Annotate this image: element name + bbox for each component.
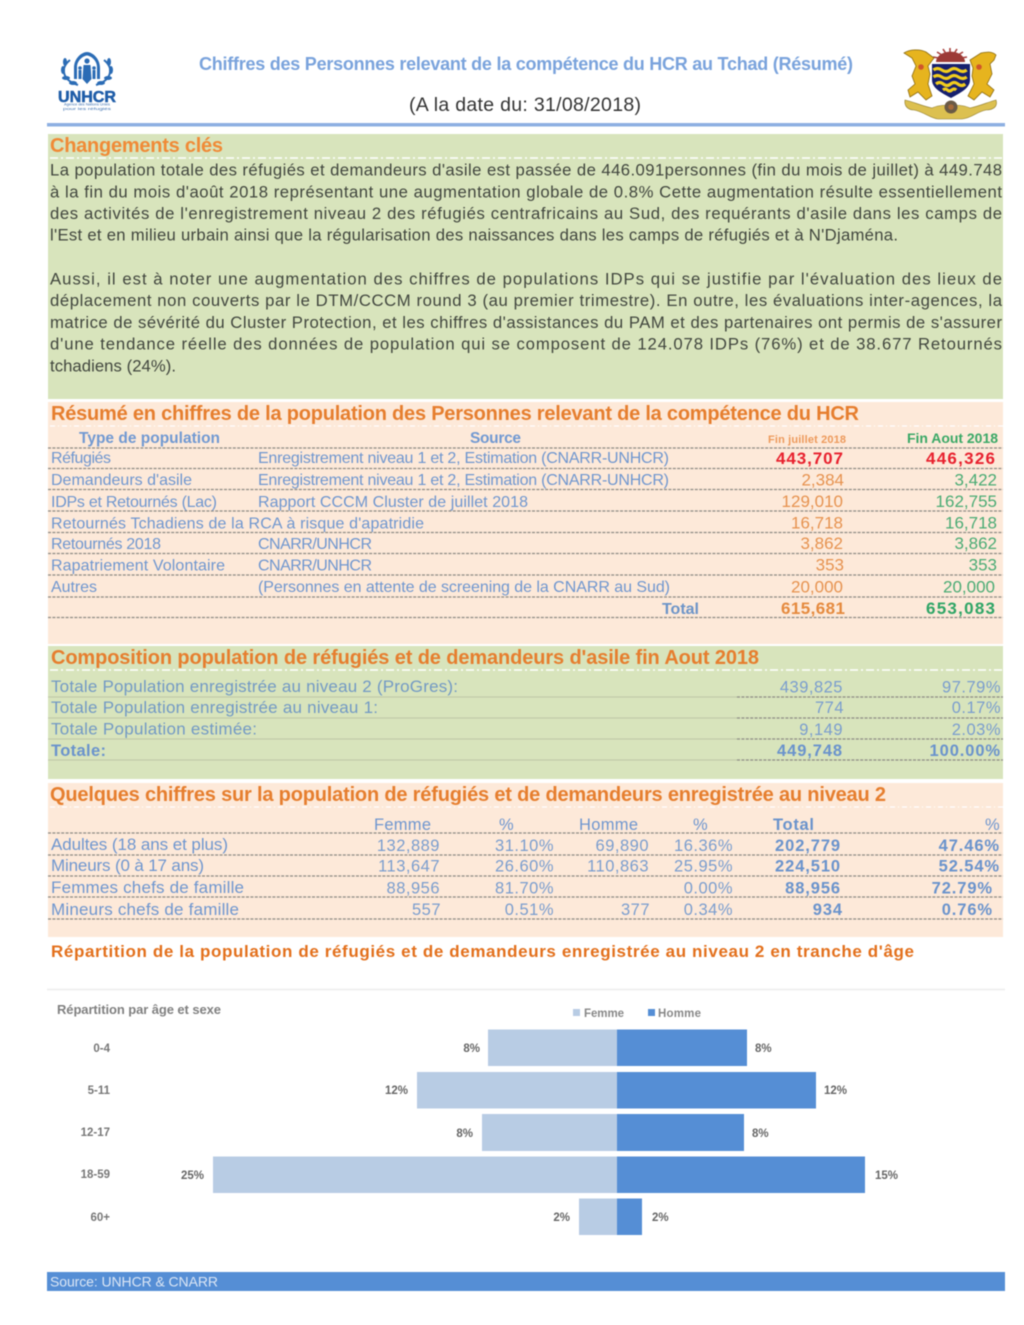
table header: Homme	[579, 816, 638, 834]
ribbon	[905, 100, 997, 119]
row: mineurs chefs de famille: 0.76%	[942, 901, 993, 919]
text block: second paragraph: d'une tendance réelle des données de population qui se composent de 124.078 IDPs (76%) et de 38.677 Retournés	[50, 334, 1002, 354]
row: Total	[662, 599, 995, 618]
row: Retournés Tchadiens de la RCA: Retournés Tchadiens de la RCA à risque d'apatridie	[51, 516, 424, 532]
row: adultes: Adultes (18 ans et plus)	[51, 835, 228, 854]
row: Réfugiés: 443,707	[776, 449, 843, 468]
lion right	[968, 52, 996, 100]
text block: first paragraph	[50, 160, 1002, 244]
row: mineurs chefs de famille: 377	[621, 901, 650, 919]
row: Rapatriement Volontaire: 353	[969, 556, 997, 574]
row: mineurs chefs de famille: 934	[813, 901, 843, 919]
value labels: 8%	[752, 1128, 769, 1140]
legend: Femme	[584, 1008, 624, 1020]
row: Réfugiés: 446,326	[926, 449, 995, 468]
footer source bar	[47, 1272, 1005, 1291]
row: femmes chefs de famille: 88,956	[387, 880, 440, 898]
lion left	[904, 50, 934, 100]
value labels: 2%	[652, 1212, 669, 1224]
row: totale: 449,748	[777, 742, 843, 760]
row: Retournés Tchadiens de la RCA	[51, 514, 997, 532]
row: femmes chefs de famille	[51, 878, 993, 898]
row: estimée: Totale Population estimée:	[51, 720, 257, 738]
row: mineurs chefs de famille: 0.51%	[505, 901, 554, 919]
row: mineurs: 25.95%	[674, 858, 733, 876]
row: Autres: 20,000	[791, 578, 843, 596]
value labels: 12%	[385, 1085, 408, 1097]
row: estimée	[51, 720, 1001, 739]
title: Chiffres des Personnes relevant de la compétence du HCR au Tchad (Résumé)	[199, 54, 853, 74]
row: totale: Totale:	[51, 742, 106, 760]
table header: Total	[773, 816, 814, 834]
row: Autres: (Personnes en attente de screening de la CNARR au Sud)	[258, 579, 670, 596]
date subtitle: (A la date du: 31/08/2018)	[409, 94, 641, 116]
row: Total: 653,083	[926, 599, 995, 618]
icon: UNHCR logo: Agence des Nations Unies	[64, 102, 110, 106]
table header: %	[499, 816, 514, 834]
text block: second paragraph	[50, 270, 1003, 376]
footer source bar: Source: UNHCR & CNARR	[50, 1274, 218, 1290]
row: Retournés Tchadiens de la RCA: 16,718	[945, 514, 997, 532]
row: niveau 1: Totale Population enregistrée au niveau 1:	[51, 698, 378, 717]
chart: pyramide par âge et sexe	[47, 990, 1005, 1235]
table header: %	[985, 816, 1000, 834]
text: UNHCR wordmark: UNHCR	[58, 89, 116, 106]
heading: composition: Composition population de réfugiés et de demandeurs d'asile fin Aout 2018	[51, 647, 759, 669]
chart title: Répartition par âge et sexe	[57, 1002, 221, 1017]
row: niveau 1: 774	[815, 699, 844, 717]
row: femmes chefs de famille: Femmes chefs de famille	[51, 878, 244, 897]
row: adultes: 69,890	[596, 837, 649, 855]
row: Retournés 2018	[51, 534, 997, 553]
row: femmes chefs de famille: 0.00%	[684, 880, 733, 898]
panel: quelques chiffres	[48, 783, 1003, 937]
heading: Changements clés: Changements clés	[50, 135, 223, 157]
row: Rapatriement Volontaire: 353	[816, 556, 844, 574]
age axis labels: 0-4	[93, 1043, 111, 1055]
text block: second paragraph: Aussi, il est à noter une augmentation des chiffres de populations IDPs qui se justifie par l'évaluation des lieux de	[50, 270, 1002, 288]
icon: UNHCR logo: pour les réfugiés	[63, 107, 111, 111]
row: totale: 100.00%	[930, 742, 1001, 760]
row: Retournés Tchadiens de la RCA: 16,718	[791, 514, 843, 532]
row: mineurs: 113,647	[378, 858, 440, 876]
row: IDPs et Retournés (Lac): 162,755	[936, 492, 997, 511]
row: estimée: 2.03%	[952, 721, 1001, 739]
row: mineurs	[51, 856, 1000, 876]
row: niveau 2: 97.79%	[942, 678, 1001, 696]
value labels: 8%	[755, 1043, 772, 1055]
table header: Fin juillet 2018	[768, 434, 846, 446]
row: femmes chefs de famille: 81.70%	[495, 880, 554, 898]
table header: Source	[470, 430, 521, 447]
age axis labels: 12-17	[81, 1127, 110, 1139]
row: totale	[51, 742, 1001, 760]
panel: composition population	[48, 646, 1003, 779]
row: mineurs chefs de famille: Mineurs chefs de famille	[51, 900, 239, 919]
row: Autres: Autres	[51, 579, 97, 596]
icon: Chad coat of arms	[904, 48, 997, 119]
heading: répartition en tranche d'âge: Répartition de la population de réfugiés et de demandeurs enregistrée au niveau 2 en tranche d'âge	[51, 942, 914, 961]
row: adultes: 31.10%	[495, 837, 554, 855]
row: mineurs: 52.54%	[939, 858, 1000, 876]
row: Retournés 2018: 3,862	[954, 534, 997, 553]
row: Rapatriement Volontaire	[51, 556, 997, 574]
row: Demandeurs d'asile	[51, 470, 997, 490]
table header: %	[693, 816, 708, 834]
text block: first paragraph: l'Est et en milieu urbain ainsi que la régularisation des naissances dans les camps de réfugiés et à N'Djaména.	[50, 226, 898, 244]
value labels	[181, 1043, 898, 1224]
row: Total: Total	[662, 601, 699, 618]
row: IDPs et Retournés (Lac)	[51, 492, 997, 511]
row: mineurs: 224,510	[775, 858, 841, 876]
row: mineurs chefs de famille: 557	[412, 901, 441, 919]
row: Réfugiés: Enregistrement niveau 1 et 2, Estimation (CNARR-UNHCR)	[258, 450, 669, 467]
panel: Changements clés	[48, 134, 1003, 399]
row: Demandeurs d'asile: Enregistrement niveau 1 et 2, Estimation (CNARR-UNHCR)	[258, 472, 669, 489]
row: femmes chefs de famille: 88,956	[785, 880, 841, 898]
age axis labels	[81, 1043, 111, 1224]
row: Réfugiés: Réfugiés	[51, 450, 111, 467]
row: IDPs et Retournés (Lac): 129,010	[782, 492, 843, 511]
value labels: 12%	[824, 1085, 847, 1097]
row: Demandeurs d'asile: Demandeurs d'asile	[51, 472, 192, 489]
table header	[374, 816, 1000, 834]
table header: Type de population	[79, 430, 220, 447]
row: Total: 615,681	[781, 599, 845, 618]
row: Rapatriement Volontaire: Rapatriement Volontaire	[51, 558, 225, 574]
row: IDPs et Retournés (Lac): Rapport CCCM Cluster de juillet 2018	[258, 494, 528, 511]
row: Retournés 2018: CNARR/UNHCR	[258, 536, 372, 553]
panel: résumé en chiffres	[48, 402, 1003, 644]
header rule	[47, 123, 1005, 126]
row: Autres	[51, 578, 995, 596]
row: mineurs chefs de famille: 0.34%	[684, 901, 733, 919]
table header	[79, 430, 998, 447]
row: Demandeurs d'asile: 3,422	[954, 470, 997, 490]
row: niveau 1: 0.17%	[952, 699, 1001, 717]
row: adultes: 202,779	[775, 837, 841, 855]
value labels: 8%	[456, 1128, 473, 1140]
row: adultes	[51, 835, 1000, 855]
text block: second paragraph: tchadiens (24%).	[50, 356, 176, 376]
row: estimée: 9,149	[799, 721, 843, 739]
row: Demandeurs d'asile: 2,384	[801, 470, 844, 490]
age axis labels: 60+	[90, 1212, 110, 1224]
bars: Homme	[617, 1030, 865, 1235]
row: niveau 2: Totale Population enregistrée au niveau 2 (ProGres):	[51, 677, 458, 696]
text block: first paragraph: à la fin du mois d'août 2018 représentant une augmentation globale de 0.8% Cette augmentation résulte essentiellement	[50, 182, 1002, 202]
heading: quelques chiffres: Quelques chiffres sur la population de réfugiés et de demandeurs enregistrée au niveau 2	[50, 784, 886, 806]
value labels: 15%	[875, 1170, 898, 1182]
row: IDPs et Retournés (Lac): IDPs et Retournés (Lac)	[51, 494, 217, 511]
value labels: 25%	[181, 1170, 204, 1182]
row: Retournés 2018: 3,862	[800, 534, 843, 553]
legend: Homme	[658, 1008, 701, 1020]
row: Retournés 2018: Retournés 2018	[51, 536, 161, 553]
bars: Femme	[213, 1030, 617, 1235]
row: mineurs: 26.60%	[495, 858, 554, 876]
value labels: 2%	[553, 1212, 570, 1224]
heading: résumé en chiffres: Résumé en chiffres de la population des Personnes relevant de la compétence du HCR	[51, 403, 860, 425]
text block: second paragraph: déplacement non couverts par le DTM/CCCM round 3 (au premier trimestre). En outre, les évaluations inter-agences, la	[50, 291, 1003, 310]
text block: first paragraph: La population totale des réfugiés et demandeurs d'asile est passée de 446.091personnes (fin du mois de juillet) à 449.748	[50, 160, 1002, 180]
row: niveau 2: 439,825	[780, 678, 843, 696]
row: Réfugiés	[51, 449, 995, 468]
row: Autres: 20,000	[943, 578, 995, 596]
shield	[932, 64, 970, 98]
row: adultes: 132,889	[377, 837, 440, 855]
row: adultes: 47.46%	[939, 837, 1000, 855]
table header: Femme	[374, 816, 431, 834]
row: adultes: 16.36%	[674, 837, 733, 855]
row: mineurs: Mineurs (0 à 17 ans)	[51, 856, 204, 875]
icon: UNHCR logo	[58, 52, 116, 111]
row: niveau 1	[51, 698, 1001, 717]
text block: second paragraph: matrice de sévérité du Cluster Protection, et les chiffres d'assistances du PAM et des partenaires ont permis de s'assurer	[50, 313, 1002, 332]
row: Rapatriement Volontaire: CNARR/UNHCR	[258, 558, 372, 574]
age axis labels: 5-11	[88, 1085, 111, 1097]
value labels: 8%	[463, 1043, 480, 1055]
row: femmes chefs de famille: 72.79%	[932, 880, 993, 898]
legend	[573, 1008, 701, 1020]
table header: Fin Aout 2018	[907, 430, 998, 446]
row: niveau 2	[51, 677, 1001, 696]
text block: first paragraph: des activités de l'enregistrement niveau 2 des réfugiés centrafricains au Sud, des requérants d'asile dans les camps de	[50, 204, 1002, 223]
age axis labels: 18-59	[81, 1169, 110, 1181]
row: mineurs chefs de famille	[51, 900, 993, 919]
row: mineurs: 110,863	[587, 858, 649, 876]
